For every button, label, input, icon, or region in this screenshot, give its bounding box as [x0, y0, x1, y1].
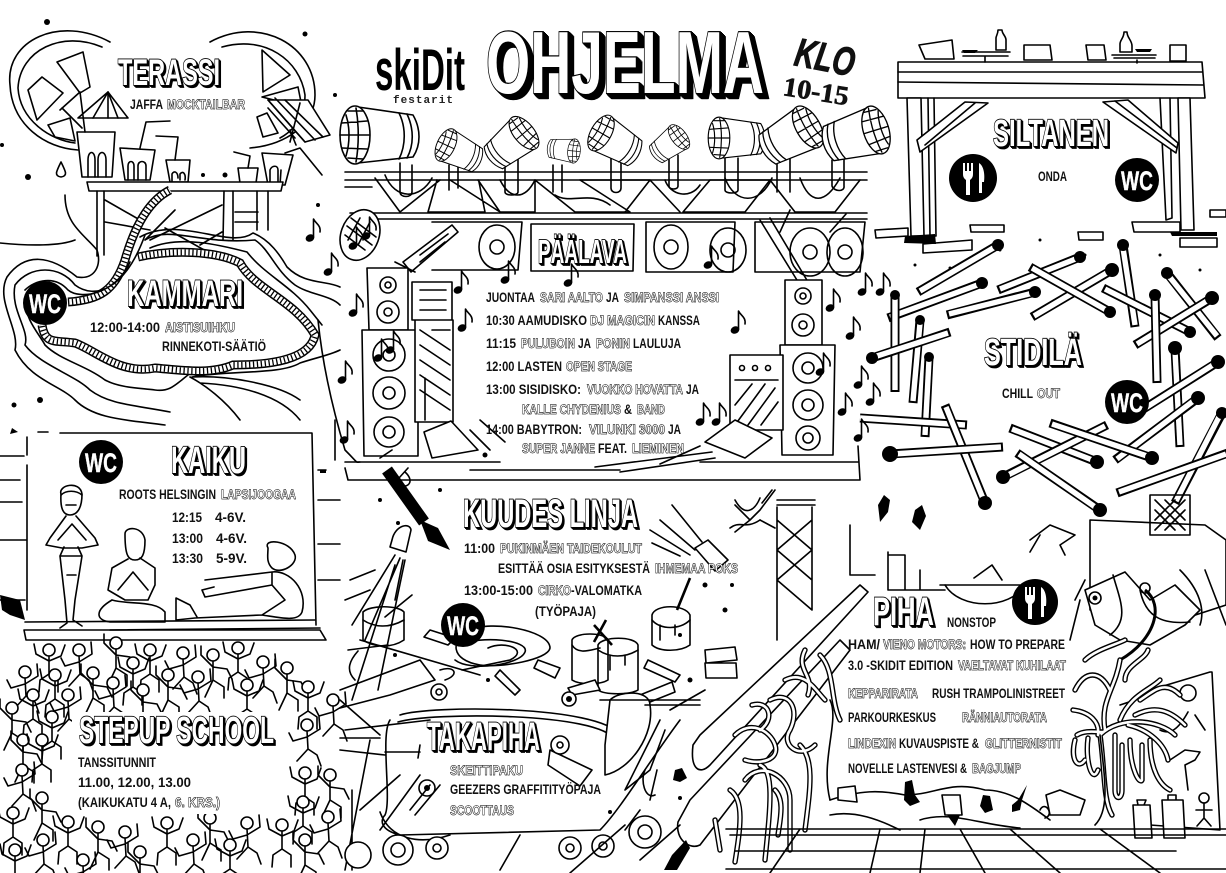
icon: WC Siltanen — [1115, 158, 1159, 202]
icon: WC Kuudes Linja — [441, 603, 485, 647]
text block: Kuudes Linja: 11:00 — [464, 541, 495, 556]
heading: OHJELMA: OHJELMA — [486, 13, 764, 112]
text block: Piha: KUVAUSPISTE & — [899, 736, 979, 751]
text block: Päälava schedule: 10:30 AAMUDISKO — [486, 313, 587, 328]
text block: Päälava schedule: JA — [578, 336, 591, 351]
panel: Siltanen wooden bridge — [875, 30, 1226, 253]
text block: Päälava schedule: BAND — [637, 402, 665, 417]
text block: Stepup School — [72, 710, 282, 814]
heading: Skidit logo: skiDit — [375, 38, 465, 103]
icon: cutlery Piha — [1012, 579, 1058, 625]
text block: Stidilä — [984, 331, 1082, 401]
text block: Päälava schedule: LAULUJA — [633, 336, 681, 351]
text block: Päälava schedule: SARI AALTO — [540, 290, 603, 305]
text block: Piha: HOW TO PREPARE — [970, 637, 1065, 652]
panel: Piha tangled noodle tree — [1073, 640, 1185, 825]
text block: Päälava schedule: & — [624, 402, 632, 417]
text block: Stidilä: CHILL — [1002, 386, 1033, 401]
text block: Kuudes Linja: 13:00-15:00 — [464, 583, 533, 598]
text block: Päälava schedule: PULUBOIN — [521, 336, 575, 351]
panel: stage floor — [318, 320, 860, 480]
text block: Piha: PIHA — [873, 590, 934, 634]
text block: Kammari: RINNEKOTI-SÄÄTIÖ — [162, 339, 266, 354]
text block: Siltanen: ONDA — [1038, 169, 1067, 184]
text block: Takapiha — [427, 715, 601, 818]
panel: Piha boombox and horse puppet — [1070, 495, 1226, 660]
text block: Kuudes Linja: KUUDES LINJA — [463, 492, 638, 536]
text block: Kammari: KAMMARI — [127, 273, 243, 314]
text block: Päälava schedule: PONIN — [596, 336, 630, 351]
text block: Päälava schedule: 11:15 — [486, 336, 516, 351]
text block: Kuudes Linja: CIRKO — [538, 583, 571, 598]
text block: Kuudes Linja — [463, 492, 738, 619]
text block: Piha: NOVELLE LASTENVESI & — [848, 761, 967, 776]
panel: Kaiku wall with yoga figures — [0, 420, 340, 640]
icon: WC Kammari: WC — [29, 289, 61, 319]
icon: cutlery Siltanen — [949, 154, 997, 202]
icon: WC Siltanen: WC — [1121, 166, 1153, 196]
panel: Kammari winding river — [0, 190, 340, 425]
text block: Kammari: AISTISUIHKU — [165, 320, 235, 335]
text block: Stepup School: (KAIKUKATU 4 A, — [78, 795, 171, 810]
text block: Kammari: 12:00-14:00 — [90, 320, 160, 335]
heading: Skidit logo — [375, 38, 465, 107]
text block: Päälava schedule: KANSSA — [658, 313, 700, 328]
text block: Terassi: MOCKTAILBAR — [167, 97, 245, 112]
text block: Terassi: TERASSI — [118, 52, 220, 93]
text block: Kuudes Linja: ESITTÄÄ OSIA ESITYKSESTÄ — [498, 561, 650, 576]
text block: Piha: RÄNNIAUTORATA — [962, 710, 1047, 725]
text block: Piha: HAM/ — [848, 637, 880, 652]
text block: Stidilä: STIDILÄ — [984, 331, 1082, 374]
panel: Takapiha skateboard — [340, 640, 705, 873]
text block: Päälava schedule — [486, 290, 719, 456]
text block: Päälava schedule: JA — [668, 422, 681, 437]
text block: Päälava schedule: OPEN STAGE — [566, 359, 632, 374]
text block: Piha: 3.0 -SKIDIT EDITION — [848, 658, 953, 673]
text block: Stepup School: 6. KRS.) — [175, 795, 220, 810]
text block: Piha: LINDEXIN — [848, 736, 896, 751]
text block: Kuudes Linja: IHMEMAA POKS — [655, 561, 738, 576]
icon: WC Stidilä — [1105, 380, 1149, 424]
icon: WC Stidilä: WC — [1111, 388, 1143, 418]
panel: turntable boxes under truss — [333, 204, 865, 285]
text block: Kuudes Linja: -VALOMATKA — [571, 583, 642, 598]
text block: Stepup School: TANSSITUNNIT — [78, 755, 157, 770]
text block: Kaiku: 12:15 — [172, 510, 202, 525]
text block: Stepup School: STEPUP SCHOOL — [79, 710, 274, 752]
text block: Päälava schedule: VUOKKO HOVATTA — [587, 382, 683, 397]
text block: Kaiku: ROOTS HELSINGIN — [119, 487, 216, 502]
text block: Siltanen: SILTANEN — [993, 113, 1109, 155]
panel: right speaker stack — [595, 280, 835, 472]
text block: Kaiku: 4-6V. — [216, 531, 247, 546]
text block: Päälava schedule: 13:00 SISIDISKO: — [486, 382, 581, 397]
text block: Kaiku: 5-9V. — [216, 551, 247, 566]
text block: Piha: KEPPARIRATA — [848, 686, 918, 701]
heading: KLO time: KLO — [791, 31, 859, 85]
text block: Piha: RUSH TRAMPOLINISTREET — [932, 686, 1066, 701]
text block: Terassi: JAFFA — [130, 97, 163, 112]
text block: Päälava schedule: JA — [686, 382, 699, 397]
text block: Piha: VAELTAVAT KUHILAAT — [958, 658, 1067, 673]
text block: Kaiku: LAPSIJOOGAA — [221, 487, 296, 502]
text block: Kaiku: 13:30 — [172, 551, 203, 566]
text block: Päälava schedule: LIEMINEN — [632, 441, 684, 456]
text block: Päälava schedule: DJ MAGICIN — [590, 313, 655, 328]
panel: Kuudes Linja paint cans and crayons — [345, 490, 775, 702]
heading: KLO time: 10-15 — [781, 71, 851, 111]
panel: Piha floor grid and spills — [726, 780, 1226, 873]
text block: Kaiku: 13:00 — [172, 531, 203, 546]
text block: Päälava schedule: VILUNKI 3000 — [589, 422, 665, 437]
text block: Päälava schedule: 12:00 LASTEN — [486, 359, 562, 374]
text block: Päälava schedule: FEAT. — [598, 441, 627, 456]
heading: Skidit logo: festarit — [393, 95, 453, 107]
text block: Kaiku: KAIKU — [171, 440, 246, 482]
text block: Takapiha: SKEITTIPAKU — [450, 763, 523, 778]
text block: Kaiku: 4-6V. — [215, 510, 246, 525]
heading: Päälava: PÄÄLAVA — [538, 233, 627, 270]
text block: Päälava schedule: JUONTAA — [486, 290, 535, 305]
text block: Piha: PARKOURKESKUS — [848, 710, 936, 725]
text block: Piha: GLITTERNISTIT — [985, 736, 1063, 751]
panel: stage truss and spotlights — [340, 101, 895, 219]
text block: Päälava schedule: JA — [606, 290, 619, 305]
text block: Piha: NONSTOP — [947, 615, 996, 630]
text block: Kuudes Linja: (TYÖPAJA) — [535, 604, 596, 619]
text block: Takapiha: GEEZERS GRAFFITITYÖPAJA — [450, 782, 601, 797]
panel: left speaker stack — [362, 268, 505, 458]
text block: Takapiha: TAKAPIHA — [427, 715, 540, 759]
text block: Stepup School: 11.00, 12.00, 13.00 — [78, 775, 191, 790]
text block: Päälava schedule: SUPER JANNE — [522, 441, 595, 456]
text block: Terassi — [118, 52, 245, 112]
text block: Stidilä: OUT — [1037, 386, 1061, 401]
text block: Päälava schedule: KALLE CHYDENIUS — [522, 402, 621, 417]
icon: WC Kaiku: WC — [85, 448, 117, 478]
text block: Päälava schedule: 14:00 BABYTRON: — [486, 422, 582, 437]
panel: Piha child's painting — [1120, 672, 1220, 838]
text block: Kammari — [90, 273, 266, 354]
text block: Piha — [848, 590, 1067, 776]
text block: Piha: VIENO MOTORS: — [883, 637, 966, 652]
text block: Kuudes Linja: PUKINMÄEN TAIDEKOULUT — [500, 541, 643, 556]
text block: Siltanen — [993, 113, 1109, 184]
text block: Takapiha: SCOOTTAUS — [450, 803, 514, 818]
icon: WC Kaiku — [79, 440, 123, 484]
panel: Terassi illustration — [10, 31, 330, 260]
crowd of dancing stick figures — [0, 634, 349, 873]
icons: music notes — [304, 219, 890, 445]
icon: WC Kuudes Linja: WC — [447, 611, 479, 641]
heading: KLO time — [781, 31, 859, 111]
icon: fountain pen — [380, 450, 450, 550]
panel: Piha tower, ramps and noodles — [664, 490, 1075, 870]
panel: Stidilä scattered matches — [860, 239, 1226, 517]
icon: WC Kammari — [23, 281, 67, 325]
text block: Kaiku — [119, 440, 296, 566]
text block: Päälava schedule: SIMPANSSI ANSSI — [624, 290, 719, 305]
text block: Piha: BAGJUMP — [972, 761, 1021, 776]
